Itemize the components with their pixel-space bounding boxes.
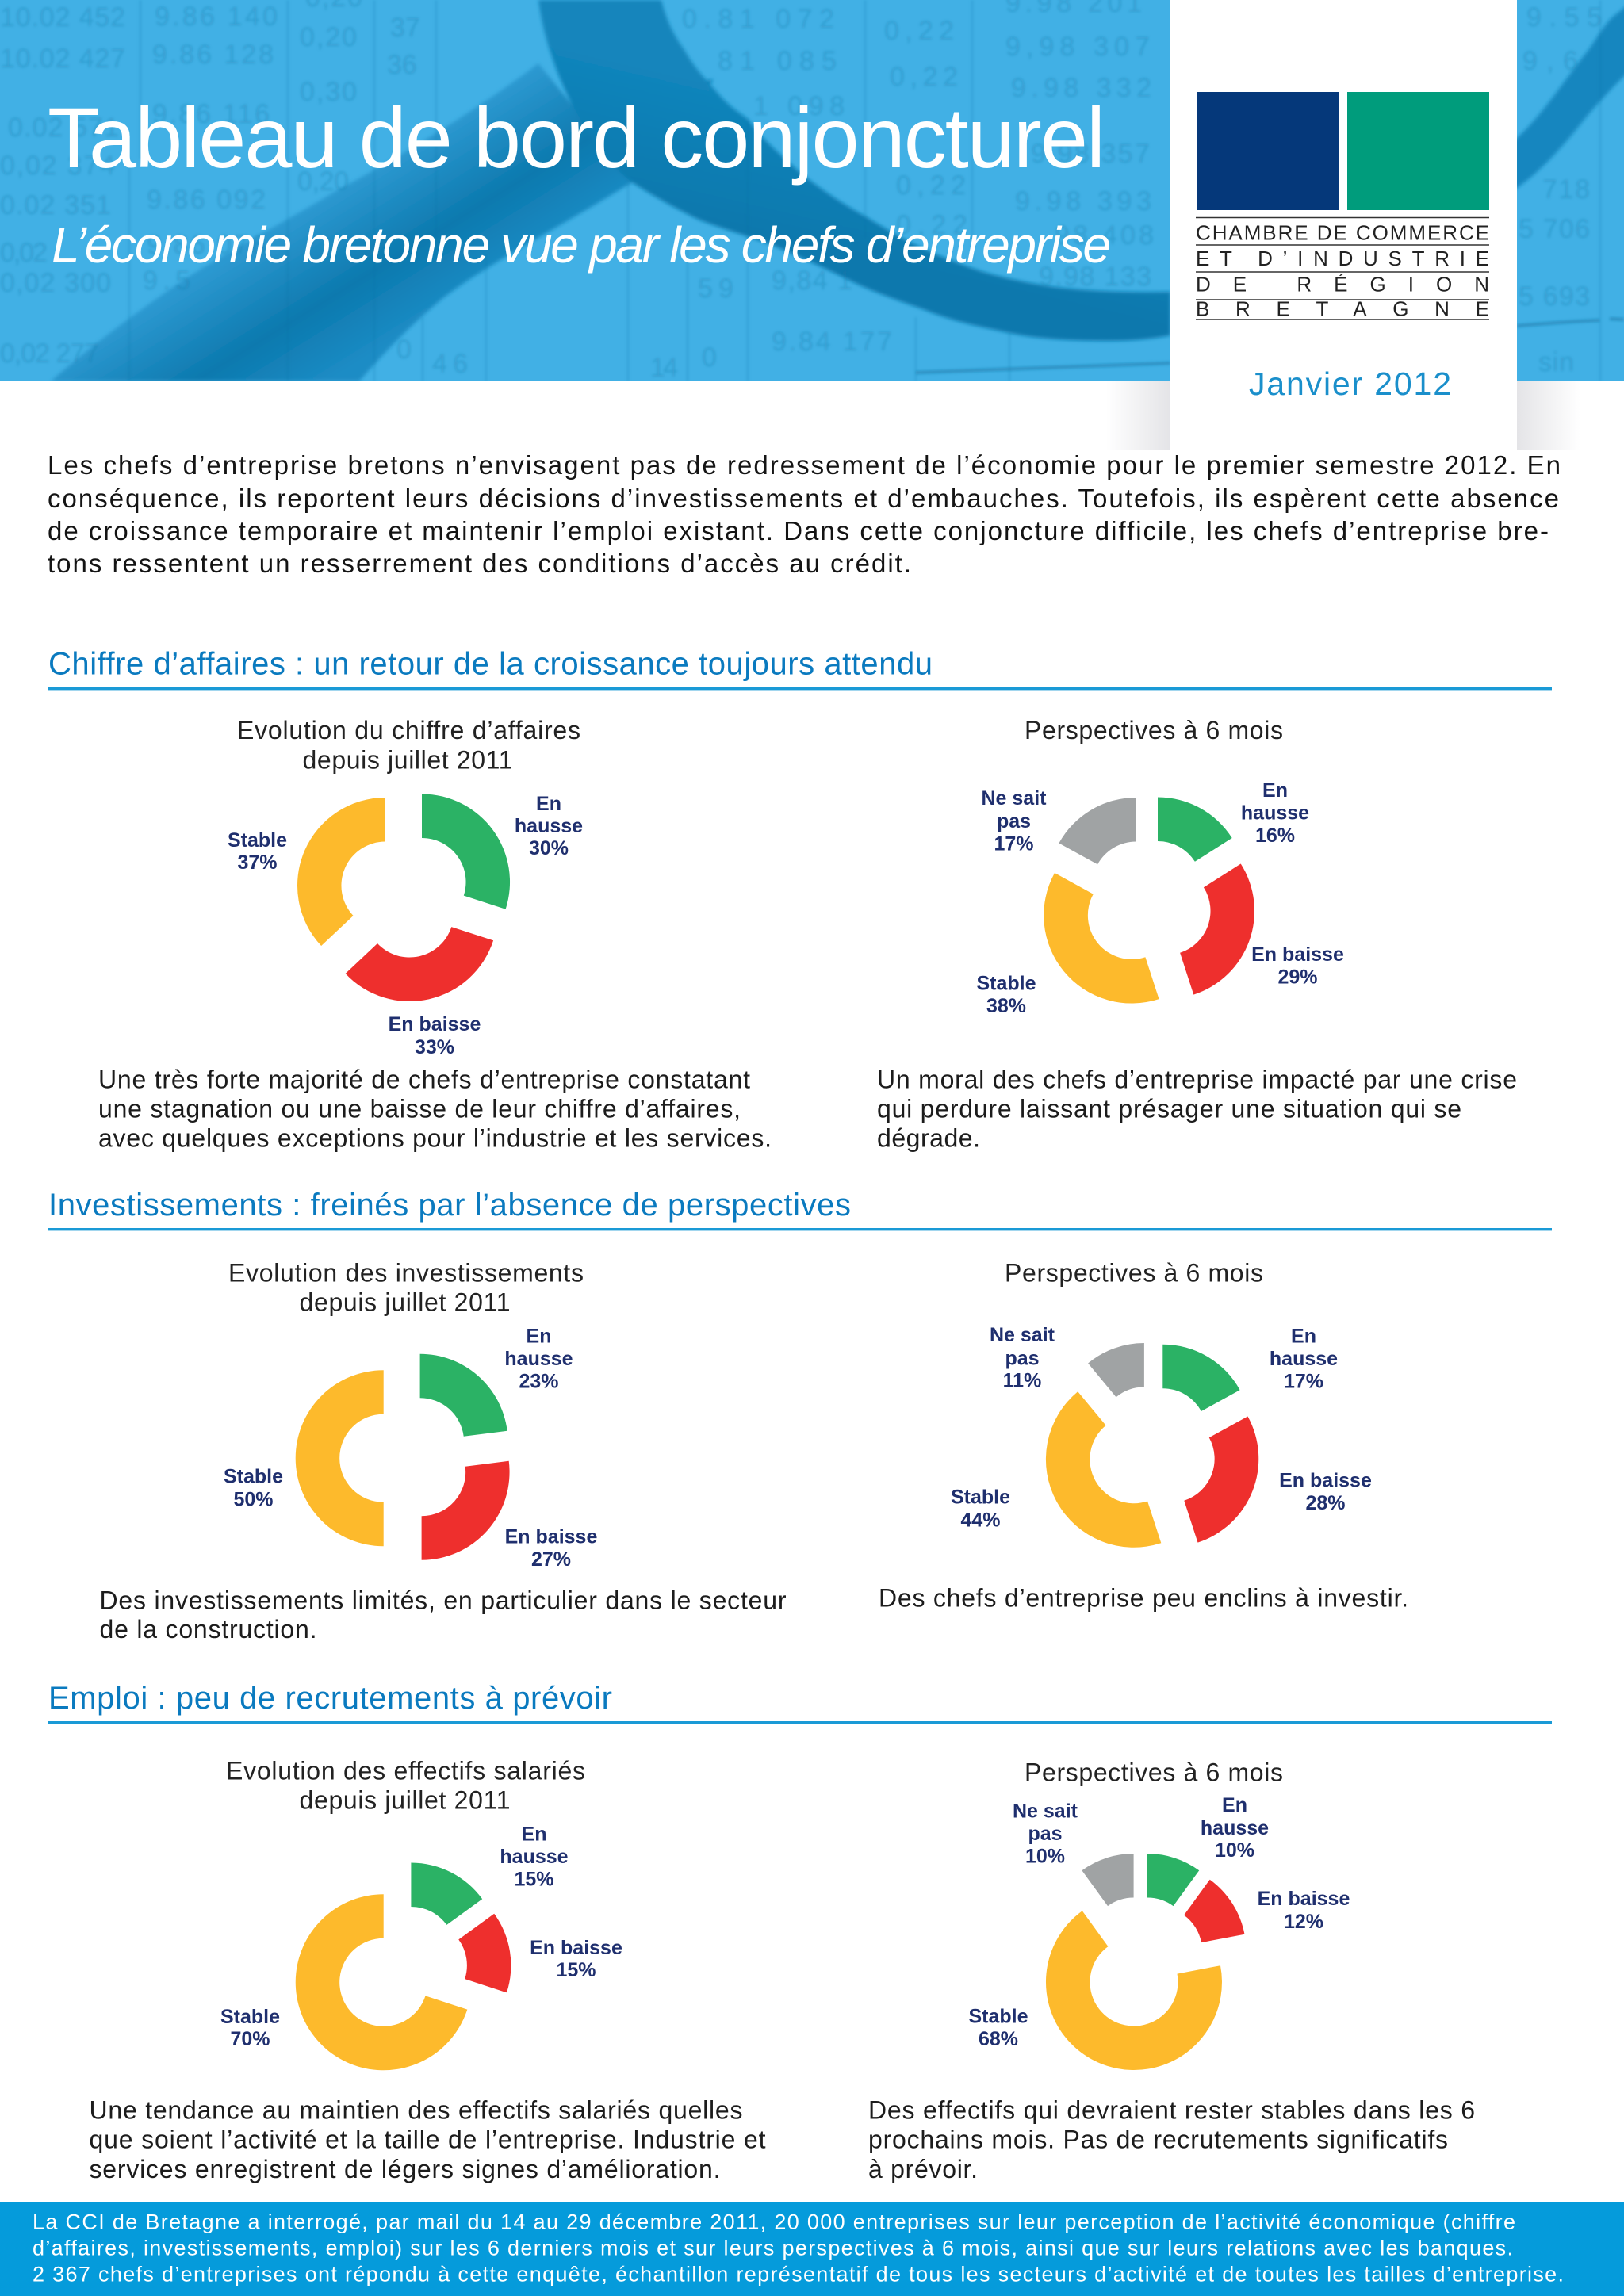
- chart title: evolution chiffre d'affaires: depuis juillet 2011: [303, 745, 512, 774]
- donut chart: perspectives chiffre d'affaires: 17%: [994, 832, 1034, 855]
- donut chart: perspectives investissements: pas: [1005, 1347, 1040, 1369]
- comment text: perspectives effectifs: [868, 2096, 1475, 2183]
- header banner: 37: [390, 13, 420, 43]
- donut chart: perspectives chiffre d'affaires: hausse: [1241, 802, 1309, 825]
- donut chart: perspectives chiffre d'affaires: [976, 779, 1344, 1017]
- header banner: 5 693: [1519, 281, 1590, 312]
- header banner: 0.02 571: [8, 113, 119, 143]
- header banner: 9.98 133: [1039, 262, 1151, 292]
- donut chart: perspectives investissements: 17%: [1284, 1371, 1323, 1393]
- donut chart: evolution effectifs: 15%: [556, 1959, 596, 1981]
- donut chart: evolution investissements: 50%: [233, 1488, 274, 1510]
- header banner: 9.98 332: [1011, 73, 1151, 103]
- header banner: 0,22: [896, 170, 966, 201]
- header banner: 9,84 1: [772, 266, 852, 296]
- logo: organisation name: DE RÉGION: [1196, 273, 1489, 297]
- header banner: 9.98 393: [1015, 186, 1151, 216]
- logo card: [1170, 0, 1517, 445]
- donut chart: perspectives effectifs: pas: [1028, 1823, 1063, 1845]
- comment text: effectifs: Une tendance au maintien des effectifs salariés quelles: [89, 2096, 742, 2125]
- donut chart: perspectives investissements: Stable: [951, 1487, 1010, 1509]
- donut chart: evolution chiffre d'affaires: En: [536, 793, 561, 815]
- header banner: 9.84 177: [772, 327, 892, 357]
- header banner: 1 098: [753, 91, 845, 121]
- header banner: 46: [432, 349, 468, 379]
- donut chart: evolution chiffre d'affaires: hausse: [515, 815, 583, 837]
- donut chart: perspectives effectifs: 12%: [1284, 1911, 1323, 1933]
- donut chart: evolution effectifs: 15%: [514, 1868, 554, 1890]
- header banner: 59: [698, 274, 733, 304]
- header banner: 81 085: [718, 46, 837, 76]
- comment text: effectifs: [89, 2096, 766, 2183]
- donut chart: evolution chiffre d'affaires: Stable: [228, 829, 287, 851]
- donut chart: perspectives chiffre d'affaires: 38%: [986, 995, 1026, 1017]
- section heading: chiffre d'affaires: [48, 647, 1552, 690]
- header banner: 9.86 092: [147, 185, 266, 215]
- donut chart: evolution investissements: [224, 1326, 597, 1571]
- logo: green square: [1347, 92, 1489, 210]
- logo: organisation name: CHAMBRE DE COMMERCE: [1196, 220, 1489, 244]
- intro paragraph: conséquence, ils reportent leurs décisions d’investissements et d’embauches. Toutefois, ils espèrent cette absence: [48, 484, 1559, 513]
- donut chart: perspectives chiffre d'affaires: pas: [997, 810, 1031, 832]
- header banner: 9.55: [1526, 2, 1602, 33]
- header banner: 718: [1542, 174, 1590, 205]
- header banner: 0,20: [297, 166, 349, 197]
- header banner: 0,02 277: [0, 339, 99, 369]
- chart title: evolution effectifs: Evolution des effectifs salariés: [226, 1757, 585, 1785]
- comment text: perspectives chiffre d'affaires: Un moral des chefs d’entreprise impacté par une crise: [877, 1066, 1517, 1094]
- logo: organisation name: BRETAGNE: [1196, 297, 1489, 320]
- donut chart: evolution effectifs: hausse: [500, 1846, 569, 1868]
- header banner: 10.02 427: [0, 44, 125, 74]
- header banner: 0,22: [890, 62, 958, 92]
- chart title: perspectives effectifs: Perspectives à 6 mois: [1025, 1758, 1283, 1787]
- donut chart: evolution investissements: En: [527, 1326, 551, 1348]
- header banner: sin: [1538, 347, 1574, 377]
- donut chart: perspectives effectifs: 10%: [1215, 1839, 1254, 1862]
- comment text: effectifs: services enregistrent de légers signes d’amélioration.: [89, 2155, 720, 2183]
- comment text: perspectives effectifs: prochains mois. Pas de recrutements significatifs: [868, 2125, 1448, 2153]
- header banner: 9.98 357: [1031, 139, 1150, 169]
- donut chart: evolution effectifs: En: [522, 1823, 546, 1846]
- header banner: 0,02 374: [0, 151, 115, 181]
- comment text: chiffre d'affaires: Une très forte majorité de chefs d’entreprise constatant: [98, 1066, 750, 1094]
- chart title: evolution effectifs: depuis juillet 2011: [300, 1785, 511, 1814]
- header banner: 0.81 072: [682, 4, 834, 34]
- donut chart: perspectives effectifs: Stable: [968, 2006, 1028, 2028]
- donut chart: perspectives effectifs: 10%: [1025, 1846, 1065, 1868]
- section heading: emploi: [48, 1681, 1552, 1724]
- header banner: [0, 0, 1624, 383]
- chart title: evolution chiffre d'affaires: [237, 716, 580, 774]
- header banner: 9,98 307: [1005, 32, 1150, 62]
- header banner: 0.02 351: [0, 190, 111, 220]
- donut chart: perspectives chiffre d'affaires: En: [1262, 779, 1288, 802]
- donut chart: perspectives effectifs: hausse: [1201, 1817, 1269, 1839]
- donut chart: evolution investissements: hausse: [504, 1348, 573, 1370]
- donut chart: perspectives effectifs: [968, 1794, 1350, 2070]
- donut chart: perspectives investissements: 11%: [1003, 1369, 1041, 1391]
- donut chart: evolution chiffre d'affaires: 30%: [529, 837, 569, 859]
- donut chart: perspectives chiffre d'affaires: Ne sait: [982, 787, 1047, 809]
- donut chart: perspectives investissements: En baisse: [1279, 1469, 1372, 1491]
- header banner: 0,02: [0, 238, 48, 268]
- header banner: 9.86 076: [147, 230, 266, 260]
- header banner: 0,22: [896, 210, 967, 240]
- header banner: 36: [387, 50, 417, 80]
- donut chart: perspectives investissements: En: [1291, 1325, 1316, 1347]
- comment text: chiffre d'affaires: [98, 1066, 772, 1153]
- footer methodology band: La CCI de Bretagne a interrogé, par mail du 14 au 29 décembre 2011, 20 000 entreprises sur leur perception de l’activité économique (chiffre: [33, 2210, 1515, 2234]
- logo: organisation name: [1196, 220, 1489, 320]
- comment text: effectifs: que soient l’activité et la taille de l’entreprise. Industrie et: [89, 2125, 766, 2153]
- date: Janvier 2012: [1249, 365, 1451, 402]
- card shadows: [1106, 381, 1580, 450]
- header banner: 9.86 116: [152, 99, 270, 129]
- donut chart: perspectives chiffre d'affaires: 16%: [1255, 825, 1295, 847]
- comment text: investissements: Des investissements limités, en particulier dans le secteur: [100, 1586, 787, 1614]
- header banner: 0: [396, 335, 412, 365]
- donut chart: perspectives effectifs: En: [1222, 1794, 1247, 1816]
- donut chart: perspectives investissements: 44%: [960, 1509, 1001, 1531]
- donut chart: perspectives chiffre d'affaires: En baisse: [1251, 943, 1344, 966]
- chart title: perspectives investissements: Perspectives à 6 mois: [1005, 1259, 1263, 1288]
- header banner: 5 706: [1519, 214, 1590, 244]
- logo: organisation name: ET D’INDUSTRIE: [1196, 247, 1489, 270]
- intro paragraph: Les chefs d’entreprise bretons n’envisagent pas de redressement de l’économie pour le premier semestre 2012. En: [48, 450, 1561, 480]
- comment text: perspectives chiffre d'affaires: qui perdure laissant présager une situation qui se: [877, 1094, 1461, 1123]
- donut chart: evolution effectifs: En baisse: [530, 1937, 622, 1959]
- footer methodology band: [0, 2202, 1624, 2296]
- comment text: perspectives effectifs: Des effectifs qui devraient rester stables dans les 6: [868, 2096, 1475, 2125]
- donut chart: evolution chiffre d'affaires: 37%: [237, 851, 278, 874]
- header banner: 0,20: [300, 22, 357, 52]
- donut chart: perspectives investissements: [951, 1324, 1372, 1548]
- donut chart: evolution chiffre d'affaires: 33%: [415, 1036, 454, 1058]
- header banner: 98 408: [1055, 220, 1154, 251]
- comment text: investissements: de la construction.: [100, 1615, 317, 1644]
- header banner: 10.02 452: [0, 2, 125, 33]
- donut chart: perspectives investissements: 28%: [1305, 1492, 1346, 1514]
- chart title: evolution investissements: depuis juillet 2011: [300, 1288, 511, 1316]
- donut chart: evolution effectifs: 70%: [230, 2028, 270, 2050]
- header banner: 9.5: [143, 266, 190, 296]
- chart title: evolution investissements: [228, 1259, 584, 1316]
- chart title: evolution effectifs: [226, 1757, 585, 1814]
- comment text: perspectives effectifs: à prévoir.: [868, 2155, 978, 2183]
- donut chart: evolution investissements: 27%: [531, 1548, 571, 1571]
- header banner: 14: [650, 353, 678, 383]
- donut chart: evolution chiffre d'affaires: En baisse: [389, 1013, 481, 1035]
- donut chart: perspectives effectifs: En baisse: [1258, 1888, 1350, 1910]
- donut chart: perspectives chiffre d'affaires: 29%: [1277, 966, 1318, 988]
- donut chart: evolution chiffre d'affaires: [228, 793, 583, 1058]
- footer methodology band: d’affaires, investissements, emploi) sur les 6 derniers mois et sur leurs perspectives à 6 mois, ainsi que sur leurs relations avec les banques.: [33, 2236, 1513, 2260]
- section heading: emploi: Emploi : peu de recrutements à prévoir: [48, 1681, 612, 1716]
- intro paragraph: tons ressentent un resserrement des conditions d’accès au crédit.: [48, 549, 911, 578]
- comment text: perspectives investissements: Des chefs d’entreprise peu enclins à investir.: [879, 1584, 1408, 1613]
- donut chart: evolution effectifs: Stable: [220, 2006, 280, 2028]
- chart title: evolution chiffre d'affaires: Evolution du chiffre d’affaires: [237, 716, 580, 744]
- comment text: perspectives chiffre d'affaires: dégrade.: [877, 1124, 980, 1153]
- logo: navy square: [1197, 92, 1339, 210]
- header banner: 0,30: [300, 77, 357, 107]
- section heading: investissements: Investissements : freinés par l’absence de perspectives: [48, 1188, 851, 1223]
- subtitle: L’économie bretonne vue par les chefs d’entreprise: [52, 216, 1111, 274]
- comment text: perspectives chiffre d'affaires: [877, 1066, 1517, 1153]
- header banner: 9.86 128: [152, 40, 274, 70]
- header banner: 0,02 300: [0, 268, 111, 298]
- header banner: 0: [702, 342, 717, 373]
- header banner: 0,22: [884, 16, 954, 46]
- intro paragraph: [48, 450, 1561, 578]
- chart title: evolution investissements: Evolution des investissements: [228, 1259, 584, 1288]
- comment text: chiffre d'affaires: une stagnation ou une baisse de leur chiffre d’affaires,: [98, 1094, 741, 1123]
- header banner: 9,6: [1522, 46, 1578, 76]
- donut chart: evolution effectifs: [220, 1823, 622, 2070]
- comment text: investissements: [100, 1586, 787, 1644]
- donut chart: evolution investissements: En baisse: [505, 1526, 597, 1548]
- footer methodology band: 2 367 chefs d’entreprises ont répondu à cette enquête, échantillon représentatif de tous les secteurs d’activité et de toutes les tailles d’entreprise.: [33, 2263, 1564, 2286]
- donut chart: perspectives effectifs: Ne sait: [1013, 1800, 1078, 1822]
- section heading: investissements: [48, 1188, 1552, 1230]
- comment text: chiffre d'affaires: avec quelques exceptions pour l’industrie et les services.: [98, 1124, 772, 1153]
- donut chart: perspectives chiffre d'affaires: Stable: [976, 972, 1036, 994]
- main title: Tableau de bord conjoncturel: [48, 90, 1105, 186]
- donut chart: evolution investissements: 23%: [519, 1370, 559, 1392]
- donut chart: evolution investissements: Stable: [224, 1466, 283, 1488]
- chart title: perspectives chiffre d'affaires: Perspectives à 6 mois: [1025, 716, 1283, 744]
- intro paragraph: de croissance temporaire et maintenir l’emploi existant. Dans cette conjoncture difficile, les chefs d’entreprise bre-: [48, 516, 1549, 545]
- header banner: 9.86 140: [155, 2, 278, 32]
- section heading: chiffre d'affaires: Chiffre d’affaires : un retour de la croissance toujours attendu: [48, 647, 933, 682]
- donut chart: perspectives investissements: hausse: [1270, 1348, 1338, 1370]
- donut chart: perspectives investissements: Ne sait: [990, 1324, 1055, 1346]
- donut chart: perspectives effectifs: 68%: [979, 2028, 1018, 2050]
